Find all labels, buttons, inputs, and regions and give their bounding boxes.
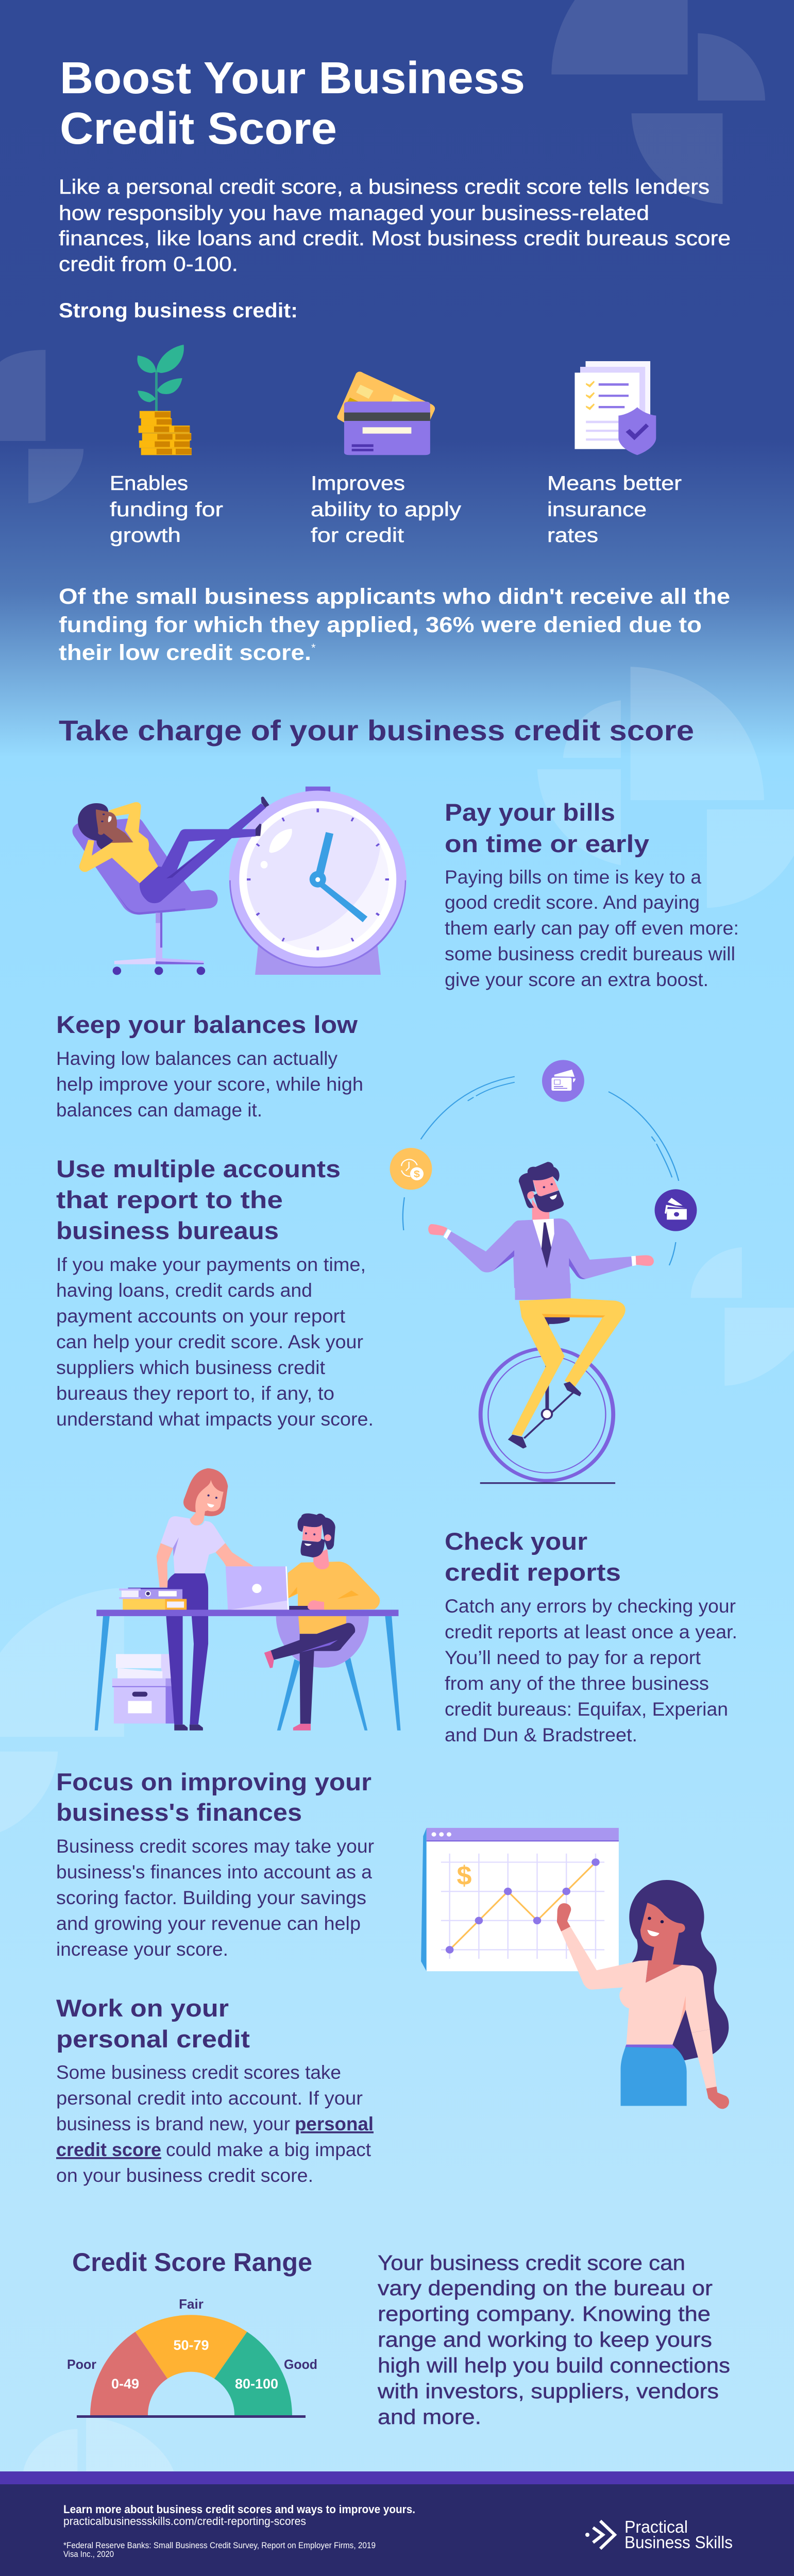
statistic callout: funding for which they applied, 36% were denied due to <box>59 613 702 637</box>
illustration: woman presenting chart <box>421 1828 729 2109</box>
text block: work on your personal credit: personal credit <box>56 2025 250 2053</box>
text block: score range explanation: high will help you build connections <box>378 2353 730 2377</box>
heading: credit score range: Credit Score Range <box>72 2248 312 2277</box>
caption: enables funding: funding for <box>110 499 223 521</box>
icon: plant growing from coins <box>137 345 192 455</box>
text block: use multiple accounts: If you make your payments on time, <box>56 1254 366 1275</box>
text block: score range explanation: reporting company. Knowing the <box>378 2302 711 2326</box>
text block: pay your bills: Pay your bills <box>445 799 615 826</box>
caption: better insurance <box>547 472 682 547</box>
text block: work on your personal credit <box>56 1994 374 2186</box>
text block: score range explanation <box>377 2251 730 2429</box>
text block: keep your balances low: help improve your score, while high <box>56 1074 363 1095</box>
text block: use multiple accounts: understand what impacts your score. <box>56 1409 374 1430</box>
title: Boost Your Business <box>60 53 525 103</box>
text block: focus on improving finances: business's finances <box>56 1799 302 1826</box>
subheading: strong business credit: Strong business credit: <box>59 299 298 322</box>
caption: enables funding: Enables <box>110 472 188 495</box>
caption: improves ability <box>311 472 462 547</box>
text block: work on your personal credit: on your business credit score. <box>56 2165 313 2186</box>
footer learn more text <box>63 2503 415 2528</box>
illustration: man juggling on unicycle: $ <box>414 1169 420 1180</box>
caption: better insurance: Means better <box>547 472 682 495</box>
text block: pay your bills: them early can pay off even more: <box>445 918 739 939</box>
logo: practical business skills: Practical <box>624 2517 688 2536</box>
text block: keep your balances low: balances can damage it. <box>56 1099 262 1121</box>
text block: work on your personal credit: personal <box>295 2113 374 2134</box>
text block: focus on improving finances: and growing your revenue can help <box>56 1913 361 1934</box>
text block: use multiple accounts: Use multiple accounts <box>56 1155 341 1182</box>
text block: pay your bills: some business credit bureaus will <box>445 943 735 964</box>
text block: use multiple accounts: that report to the <box>56 1186 283 1213</box>
statistic callout: their low credit score. <box>59 640 311 665</box>
text block: work on your personal credit: personal credit into account. If your <box>56 2088 363 2109</box>
text block: pay your bills: good credit score. And paying <box>445 892 700 913</box>
text block: check your credit reports: credit reports <box>445 1558 621 1586</box>
caption: improves ability: ability to apply <box>311 499 462 521</box>
logo: practical business skills: Business Skills <box>624 2533 733 2552</box>
gauge chart: Poor <box>67 2357 96 2372</box>
gauge chart: 50-79 <box>173 2337 209 2353</box>
text block: use multiple accounts: suppliers which business credit <box>56 1357 326 1378</box>
statistic callout: Of the small business applicants who didn't receive all the <box>59 584 730 609</box>
title: Credit Score <box>60 104 337 154</box>
text block: work on your personal credit: business is brand new, your <box>56 2113 290 2134</box>
text block: check your credit reports: credit reports at least once a year. <box>445 1621 737 1642</box>
text block: work on your personal credit: credit score <box>56 2139 161 2160</box>
text block: score range explanation: with investors, suppliers, vendors <box>377 2379 719 2403</box>
text block: use multiple accounts: business bureaus <box>56 1217 279 1244</box>
footer sources: Visa Inc., 2020 <box>63 2549 114 2559</box>
text block: pay your bills <box>445 799 739 990</box>
text block: focus on improving finances: Business credit scores may take your <box>56 1836 374 1857</box>
caption: better insurance: insurance <box>547 499 647 521</box>
text block: use multiple accounts: having loans, credit cards and <box>56 1280 312 1301</box>
text block: check your credit reports: You’ll need to pay for a report <box>445 1647 701 1668</box>
caption: better insurance: rates <box>547 524 598 547</box>
title <box>60 53 525 154</box>
text block: use multiple accounts: can help your credit score. Ask your <box>56 1331 363 1352</box>
text block: score range explanation: Your business credit score can <box>378 2251 685 2275</box>
icon: credit cards <box>337 371 435 455</box>
caption: enables funding <box>110 472 223 547</box>
text block: keep your balances low: Having low balances can actually <box>56 1048 337 1069</box>
icon: documents with shield <box>575 361 656 455</box>
footer learn more text: Learn more about business credit scores and ways to improve yours. <box>63 2503 415 2516</box>
text block: score range explanation: range and working to keep yours <box>378 2328 712 2351</box>
gauge chart: Good <box>284 2357 317 2372</box>
intro paragraph: how responsibly you have managed your business-related <box>59 202 649 225</box>
text block: keep your balances low <box>56 1011 363 1121</box>
text block: focus on improving finances: business's finances into account as a <box>56 1861 372 1883</box>
text block: focus on improving finances: scoring factor. Building your savings <box>56 1887 366 1908</box>
intro paragraph: Like a personal credit score, a business credit score tells lenders <box>59 176 709 198</box>
text block: pay your bills: Paying bills on time is key to a <box>445 867 701 888</box>
text block: focus on improving finances: increase your score. <box>56 1939 228 1960</box>
text block: check your credit reports: and Dun & Bradstreet. <box>445 1724 637 1745</box>
logo: practical business skills <box>585 2517 733 2552</box>
gauge chart: 0-49 <box>111 2376 139 2392</box>
text block: focus on improving finances: Focus on improving your <box>56 1768 371 1795</box>
illustration: man juggling on unicycle <box>390 1060 697 1484</box>
caption: enables funding: growth <box>110 524 181 547</box>
caption: improves ability: for credit <box>311 524 404 547</box>
text block: use multiple accounts: payment accounts on your report <box>56 1306 346 1327</box>
text block: check your credit reports: credit bureaus: Equifax, Experian <box>445 1699 728 1720</box>
illustration: woman relaxing by clock <box>73 787 407 975</box>
footer band <box>0 2471 794 2484</box>
gauge chart: Fair <box>179 2296 204 2312</box>
footer sources <box>63 2540 376 2559</box>
statistic callout: * <box>311 641 316 654</box>
intro paragraph <box>59 176 731 276</box>
gauge chart: 80-100 <box>235 2376 278 2392</box>
statistic callout <box>59 584 730 665</box>
text block: score range explanation: and more. <box>378 2405 481 2429</box>
text block: score range explanation: vary depending on the bureau or <box>378 2276 713 2300</box>
illustration: two colleagues at a desk <box>95 1468 401 1731</box>
text block: pay your bills: give your score an extra boost. <box>445 969 708 990</box>
footer sources: *Federal Reserve Banks: Small Business Credit Survey, Report on Employer Firms, 2019 <box>63 2540 376 2550</box>
footer panel <box>0 2484 794 2576</box>
caption: improves ability: Improves <box>311 472 405 495</box>
text block: work on your personal credit: Some business credit scores take <box>56 2062 341 2083</box>
text block: pay your bills: on time or early <box>445 830 649 857</box>
intro paragraph: finances, like loans and credit. Most business credit bureaus score <box>59 227 731 250</box>
section heading: Take charge of your business credit score <box>59 714 694 747</box>
text block: work on your personal credit: Work on your <box>56 1994 229 2022</box>
text block: check your credit reports <box>445 1528 737 1745</box>
footer learn more text: practicalbusinessskills.com/credit-reporting-scores <box>63 2515 306 2528</box>
text block: check your credit reports: Catch any errors by checking your <box>445 1596 736 1617</box>
text block: focus on improving finances <box>56 1768 374 1960</box>
text block: check your credit reports: from any of the three business <box>445 1673 709 1694</box>
chart dollar sign: $ <box>457 1861 472 1891</box>
text block: check your credit reports: Check your <box>445 1528 587 1555</box>
gauge chart <box>67 2296 317 2418</box>
text block: keep your balances low: Keep your balances low <box>56 1011 358 1038</box>
text block: use multiple accounts <box>56 1155 374 1430</box>
intro paragraph: credit from 0-100. <box>59 253 238 276</box>
text block: use multiple accounts: bureaus they report to, if any, to <box>56 1383 334 1404</box>
text block: work on your personal credit: could make a big impact <box>166 2139 371 2160</box>
